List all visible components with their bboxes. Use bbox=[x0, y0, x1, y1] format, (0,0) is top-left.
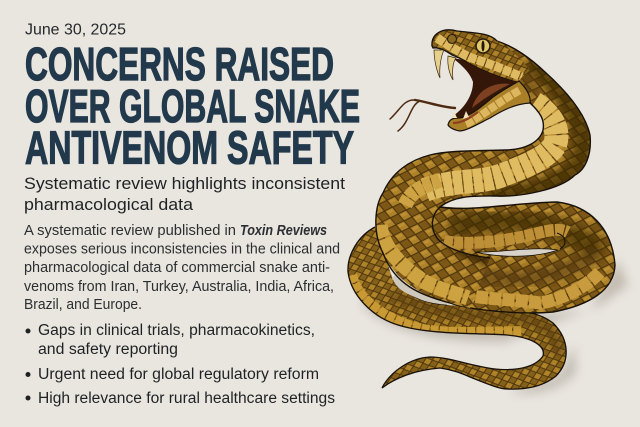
snake head bbox=[428, 25, 533, 131]
body paragraph: venoms from Iran, Turkey, Australia, India, Africa, bbox=[24, 279, 334, 295]
body paragraph: exposes serious inconsistencies in the clinical and bbox=[24, 242, 340, 258]
subtitle: Systematic review highlights inconsistent bbox=[24, 174, 345, 193]
bullet: gaps: and safety reporting bbox=[38, 341, 178, 358]
date: June 30, 2025 bbox=[25, 22, 126, 38]
head top bbox=[432, 30, 530, 82]
head outline bbox=[432, 30, 517, 82]
body paragraph: Toxin Reviews bbox=[240, 223, 327, 239]
bullet: gaps: Gaps in clinical trials, pharmacokinetics, bbox=[38, 322, 315, 339]
open mouth bbox=[452, 59, 517, 118]
bullet: rural: High relevance for rural healthcare settings bbox=[38, 390, 335, 407]
title: CONCERNS RAISED bbox=[25, 38, 334, 90]
upper lip scales bbox=[437, 38, 522, 77]
lower jaw bbox=[448, 81, 530, 131]
tongue bbox=[390, 100, 455, 131]
subtitle bbox=[24, 174, 345, 214]
bullet list bbox=[26, 322, 335, 407]
large body coil bbox=[386, 201, 616, 314]
bullet: reform: Urgent need for global regulatory reform bbox=[38, 366, 319, 383]
subtitle: pharmacological data bbox=[24, 195, 194, 214]
body paragraph: A systematic review published in bbox=[24, 223, 236, 239]
lower coil and tail bbox=[347, 226, 567, 390]
lower coil gap bbox=[392, 270, 452, 305]
body paragraph: Brazil, and Europe. bbox=[24, 297, 142, 313]
coil gap bbox=[475, 249, 558, 256]
snake illustration bbox=[340, 25, 628, 395]
bullet: gaps bbox=[26, 322, 315, 358]
body paragraph bbox=[24, 223, 340, 313]
eye bbox=[476, 39, 490, 53]
title: ANTIVENOM SAFETY bbox=[25, 122, 354, 174]
title bbox=[25, 38, 360, 174]
nostril bbox=[448, 34, 456, 44]
title: OVER GLOBAL SNAKE bbox=[25, 80, 360, 132]
upper body and neck bbox=[375, 40, 592, 308]
lower teeth bbox=[452, 111, 469, 119]
body paragraph: pharmacological data of commercial snake anti- bbox=[24, 260, 330, 276]
fangs bbox=[434, 50, 456, 80]
ground shadow bbox=[360, 260, 628, 393]
